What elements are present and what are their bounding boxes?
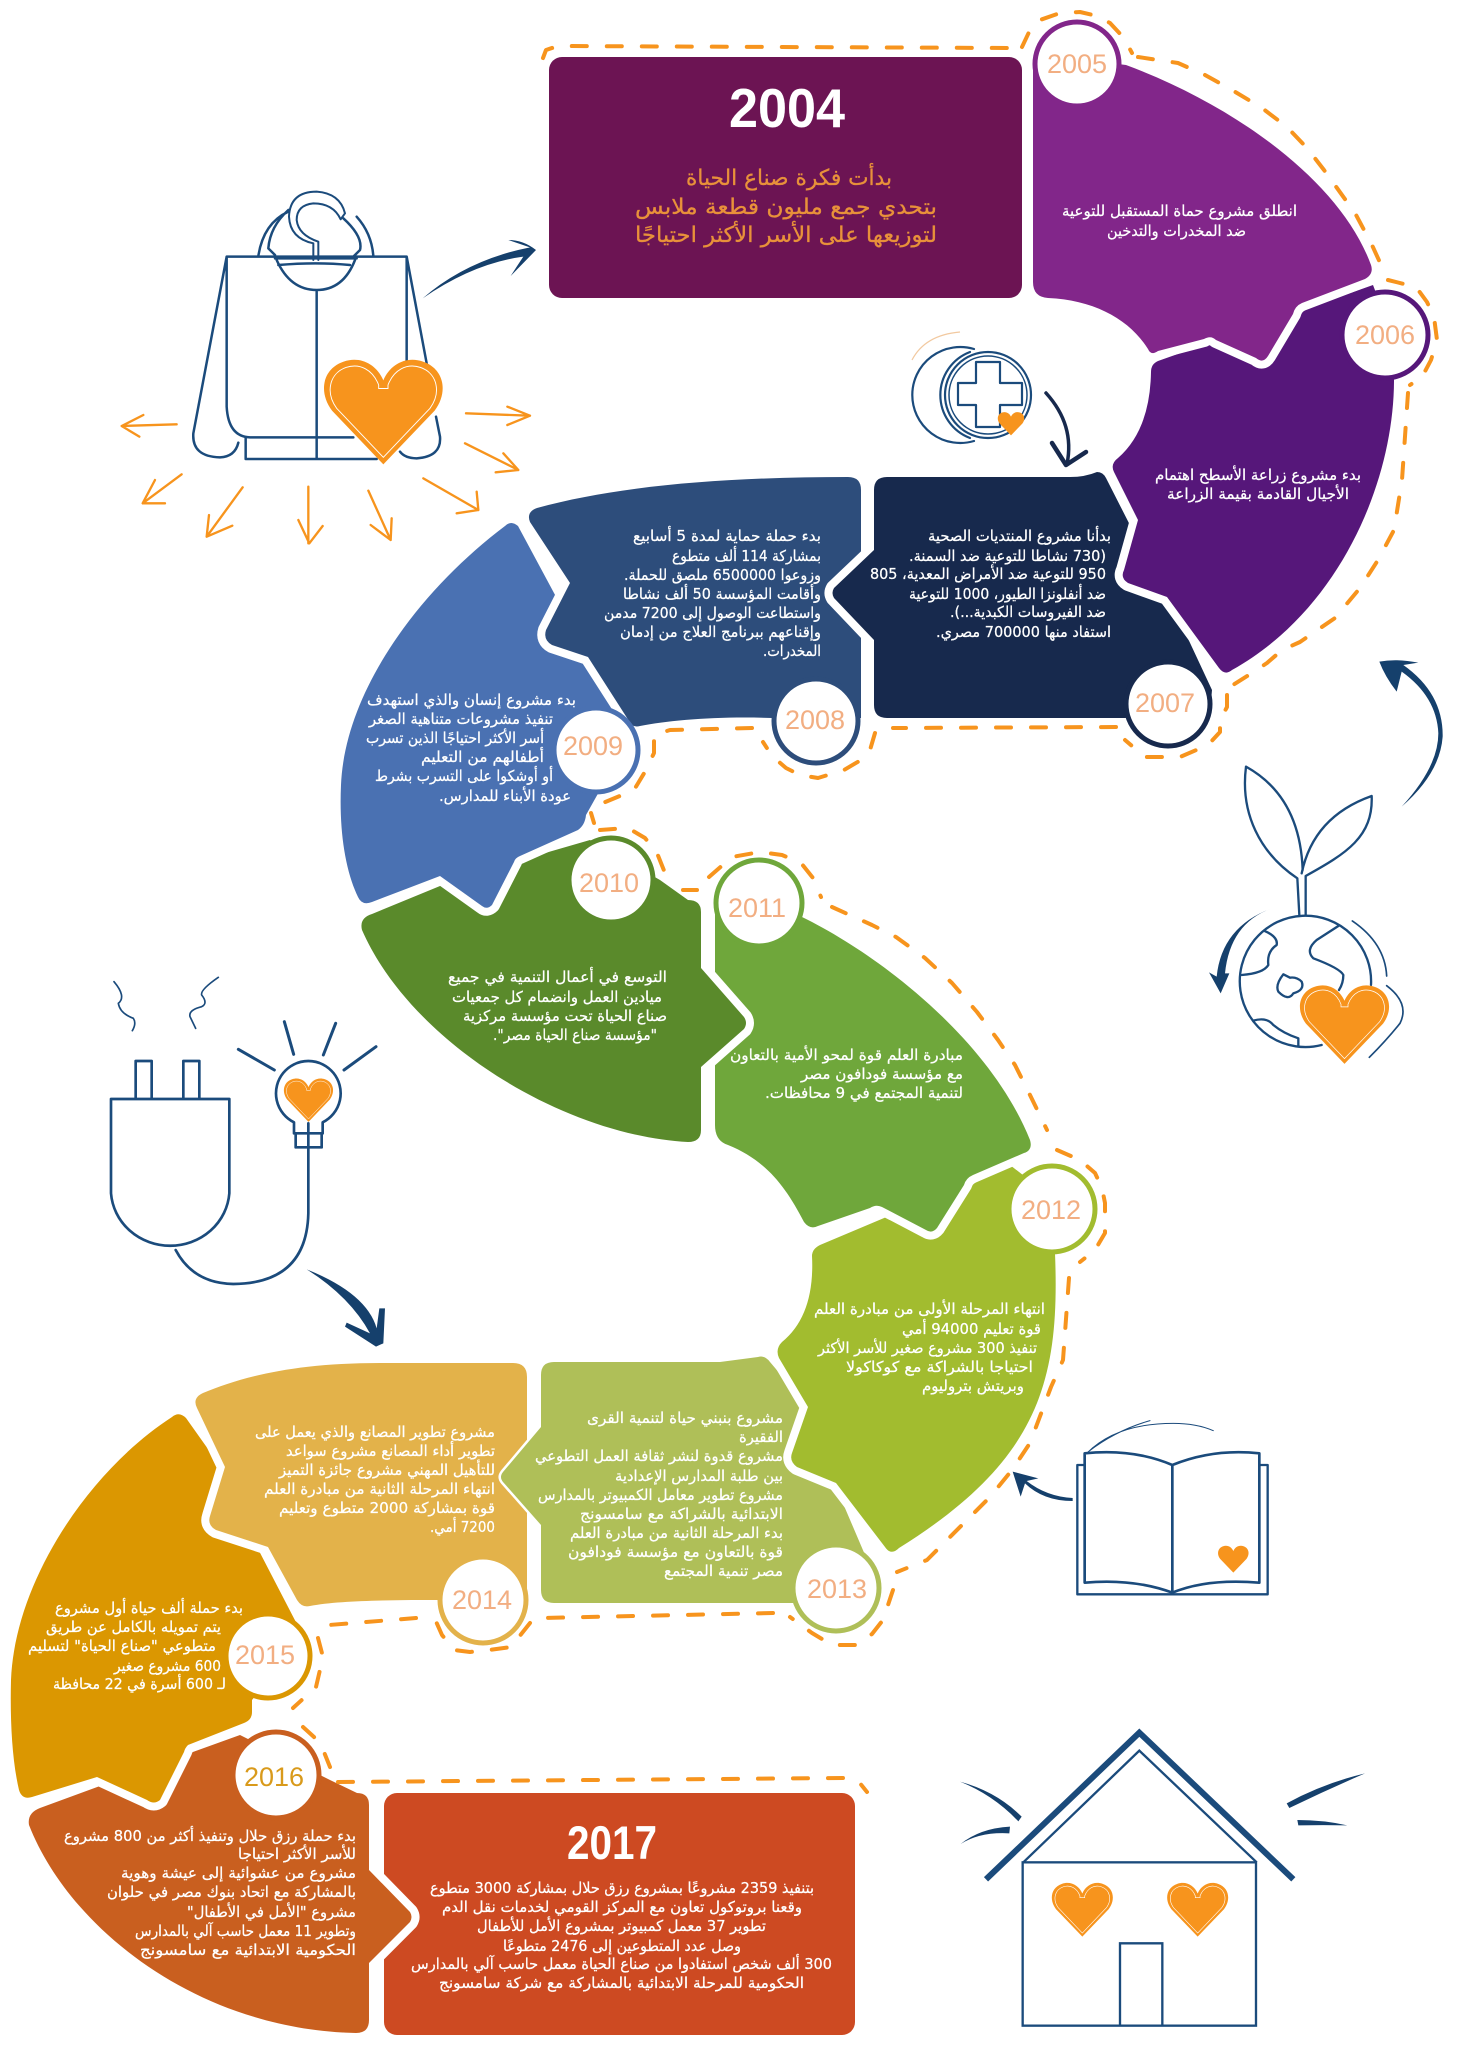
text block: 2012: انتهاء المرحلة الأولى من مبادرة العلم	[814, 1299, 1045, 1318]
text block: 2007: ضد الفيروسات الكبدية...).	[950, 603, 1106, 621]
text block: 2015	[28, 1598, 243, 1694]
text block: 2005: انطلق مشروع حماة المستقبل للتوعية	[1062, 202, 1297, 220]
year badge: 2015: 2015	[235, 1640, 295, 1670]
year badge: 2008: 2008	[785, 705, 845, 735]
text block: 2008: وإقناعهم ببرنامج العلاج من إدمان	[620, 623, 821, 642]
text block: 2005	[1062, 202, 1297, 240]
icon: medical coin	[912, 332, 1031, 443]
icon: plug and bulb	[111, 977, 376, 1284]
year badge: 2016: 2016	[244, 1762, 304, 1792]
dashed timeline outline	[293, 12, 1437, 1792]
icon: jacket with heart	[193, 192, 443, 464]
text block: 2008	[604, 526, 821, 660]
panel: 2011	[715, 900, 1031, 1232]
text block: 2005: ضد المخدرات والتدخين	[1107, 222, 1246, 240]
text block: 2015: متطوعي "صناع الحياة" لتسليم	[28, 1637, 216, 1656]
panel: 2014	[195, 1363, 527, 1606]
panel: 2007	[832, 472, 1212, 718]
year badge: 2013: 2013	[807, 1574, 867, 1604]
text block: 2012: قوة تعليم 94000 أمي	[902, 1319, 1041, 1339]
panel: 2008	[529, 477, 861, 726]
text block: 2009: أو أوشكوا على التسرب بشرط	[375, 766, 553, 785]
panel: 2017	[384, 1793, 855, 2035]
text block: 2016: بالمشاركة مع اتحاد بنوك مصر في حلوان	[107, 1883, 356, 1902]
year badge: 2011: 2011	[728, 893, 786, 923]
panel: 2004	[549, 57, 1022, 298]
year badge: 2008	[774, 679, 858, 763]
text block: 2017	[411, 1879, 832, 1992]
text block: 2015: يتم تمويله بالكامل عن طريق	[46, 1618, 221, 1636]
year badge: 2011	[716, 860, 802, 946]
text block: 2013: بين طلبة المدارس الإعدادية	[615, 1467, 783, 1485]
text block: 2017: تطوير 37 معمل كمبيوتر بمشروع الأمل للأطفال	[477, 1916, 766, 1935]
text block: 2017: 300 ألف شخص استفادوا من صناع الحياة معمل حاسب آلي بالمدارس	[411, 1954, 832, 1974]
year badge: 2005	[1035, 22, 1119, 106]
text block: 2015: 600 مشروع صغير	[113, 1657, 221, 1675]
icon: heart left	[1052, 1883, 1113, 1937]
panel: 2010	[361, 840, 746, 1142]
text block: 2017: الحكومية للمرحلة الابتدائية بالمشاركة مع شركة سامسونج	[439, 1974, 804, 1992]
text block: 2009: بدء مشروع إنسان والذي استهدف	[367, 691, 576, 710]
text block: 2014: 7200 أمي.	[430, 1517, 495, 1537]
arrow: book to 2012	[1013, 1472, 1073, 1501]
text block: 2016: بدء حملة رزق حلال وتنفيذ أكثر من 800 مشروع	[64, 1826, 356, 1845]
text block: 2009: عودة الأبناء للمدارس.	[439, 786, 571, 805]
text block: 2008: واستطاعت الوصول إلى 7200 مدمن	[604, 604, 821, 622]
panel: 2006	[1113, 285, 1394, 673]
text block: 2016: للأسر الأكثر احتياجا	[238, 1844, 356, 1863]
panel: 2015	[11, 1414, 300, 1802]
year badge: 2009: 2009	[563, 731, 623, 761]
icon: heart	[284, 1079, 333, 1122]
icon: house with hearts	[960, 1733, 1365, 2026]
text block: 2013: مشروع بنبني حياة لتنمية القرى	[587, 1409, 783, 1428]
text block: 2015: بدء حملة ألف حياة أول مشروع	[55, 1598, 243, 1617]
year badge: 2006	[1342, 292, 1428, 378]
year badge: 2012: 2012	[1021, 1195, 1081, 1225]
text block: 2010	[448, 967, 667, 1044]
text block: 2004: بتحدي جمع مليون قطعة ملابس	[635, 195, 937, 220]
text block: 2004: بدأت فكرة صناع الحياة	[686, 163, 892, 191]
text block: 2011: لتنمية المجتمع في 9 محافظات.	[765, 1084, 963, 1103]
text block: 2014: مشروع تطوير المصانع والذي يعمل على	[255, 1423, 495, 1442]
text block: 2004	[635, 163, 937, 248]
text block: 2013: الفقيرة	[739, 1428, 783, 1446]
text block: 2008: وزوعوا 6500000 ملصق للحملة.	[624, 566, 821, 584]
text block: 2007: 950 للتوعية ضد الأمراض المعدية، 805	[870, 564, 1106, 583]
text block: 2011: مبادرة العلم قوة لمحو الأمية بالتعاون	[730, 1045, 963, 1064]
text block: 2014: انتهاء المرحلة الثانية من مبادرة العلم	[264, 1480, 495, 1498]
icon: heart right	[1167, 1883, 1228, 1937]
text block: 2012	[814, 1299, 1045, 1395]
panel: 2005	[1033, 64, 1372, 361]
text block: 2008: المخدرات.	[763, 642, 821, 660]
panel: 2012	[778, 1165, 1056, 1552]
text block: 2014	[255, 1423, 495, 1537]
text block: 2013: قوة بالتعاون مع مؤسسة فودافون	[568, 1543, 783, 1561]
text block: 2006: بدء مشروع زراعة الأسطح اهتمام	[1155, 465, 1361, 484]
text block: 2007: (730 نشاطا للتوعية ضد السمنة.	[909, 547, 1106, 565]
arrow: jacket to 2004	[423, 240, 536, 298]
text block: 2006	[1155, 465, 1361, 503]
text block: 2017: وقعنا بروتوكول تعاون مع المركز القومي لخدمات نقل الدم	[442, 1898, 802, 1917]
panel: 2009	[341, 523, 640, 908]
text block: 2008: بمشاركة 114 ألف متطوع	[672, 546, 821, 565]
year badge: 2006: 2006	[1355, 320, 1415, 350]
text block: 2014: للتأهيل المهني مشروع جائزة التميز	[278, 1459, 495, 1480]
text block: 2013: بدء المرحلة الثانية من مبادرة العلم	[570, 1524, 783, 1542]
heading: 2017: 2017	[567, 1816, 657, 1869]
text block: 2009	[366, 691, 576, 805]
text block: 2007	[870, 526, 1111, 642]
panel: 2013	[501, 1357, 880, 1603]
text block: 2007: استفاد منها 700000 مصري.	[936, 623, 1111, 642]
text block: 2015: لـ 600 أسرة في 22 محافظة	[53, 1674, 226, 1694]
text block: 2006: الأجيال القادمة بقيمة الزراعة	[1167, 484, 1349, 503]
year badge: 2010	[569, 838, 653, 922]
text block: 2010: التوسع في أعمال التنمية في جميع	[448, 967, 667, 987]
text block: 2014: تطوير أداء المصانع مشروع سواعد	[286, 1441, 495, 1460]
year badge: 2014	[440, 1557, 526, 1643]
icon: orange arrows around jacket	[122, 407, 530, 543]
arrow: globe rotation	[1209, 908, 1272, 993]
icon: open book	[1077, 1421, 1268, 1594]
text block: 2009: تنفيذ مشروعات متناهية الصغر	[368, 710, 553, 728]
year badge: 2013	[793, 1545, 879, 1631]
text block: 2016: مشروع من عشوائية إلى عيشة وهوية	[121, 1864, 356, 1882]
year badge: 2007	[1126, 662, 1210, 746]
text block: 2004: لتوزيعها على الأسر الأكثر احتياجًا	[635, 221, 937, 248]
text block: 2012: تنفيذ 300 مشروع صغير للأسر الأكثر	[817, 1338, 1037, 1357]
text block: 2012: وبريتش بتروليوم	[922, 1377, 1024, 1395]
text block: 2011	[730, 1045, 963, 1103]
text block: 2016: مشروع "الأمل في الأطفال"	[187, 1902, 356, 1922]
text block: 2009: أطفالهم من التعليم	[421, 747, 544, 766]
text block: 2011: مع مؤسسة فودافون مصر	[800, 1065, 963, 1083]
text block: 2009: أسر الأكثر احتياجًا الذين تسرب	[366, 728, 544, 747]
icon: heart	[998, 412, 1024, 435]
year badge: 2015	[226, 1614, 310, 1698]
text block: 2013: مشروع تطوير معامل الكمبيوتر بالمدارس	[538, 1486, 783, 1504]
icon: heart	[324, 360, 443, 464]
text block: 2010: صناع الحياة تحت مؤسسة مركزية	[463, 1007, 667, 1025]
arrow: globe to 2006	[1379, 660, 1443, 807]
year badge: 2007: 2007	[1135, 688, 1195, 718]
arrow: medical icon to panel	[1046, 393, 1086, 465]
text block: 2017: وصل عدد المتطوعين إلى 2476 متطوعًا	[503, 1937, 741, 1955]
text block: 2010: "مؤسسة صناع الحياة مصر".	[493, 1026, 657, 1044]
text block: 2007: ضد أنفلونزا الطيور، 1000 للتوعية	[909, 584, 1106, 603]
text block: 2013	[535, 1409, 783, 1580]
year badge: 2005: 2005	[1047, 49, 1107, 79]
year badge: 2014: 2014	[452, 1585, 512, 1615]
text block: 2016: الحكومية الابتدائية مع سامسونج	[140, 1941, 356, 1959]
panel: 2016	[29, 1735, 411, 2033]
text block: 2012: احتياجا بالشراكة مع كوكاكولا	[846, 1358, 1033, 1376]
text block: 2013: مصر تنمية المجتمع	[664, 1562, 783, 1580]
arrow: plug to 2014	[307, 1269, 385, 1347]
icon: heart	[1300, 985, 1389, 1064]
year badge: 2009	[554, 708, 638, 792]
text block: 2016: وتطوير 11 معمل حاسب آلي بالمدارس	[135, 1922, 356, 1941]
year badge: 2012	[1009, 1166, 1095, 1252]
heading: 2004: 2004	[729, 77, 845, 139]
text block: 2007: بدأنا مشروع المنتديات الصحية	[928, 526, 1111, 545]
text block: 2013: الابتدائية بالشراكة مع سامسونج	[580, 1505, 783, 1523]
text block: 2014: قوة بمشاركة 2000 متطوع وتعليم	[279, 1499, 495, 1517]
text block: 2013: مشروع قدوة لنشر ثقافة العمل التطوعي	[535, 1447, 783, 1466]
text block: 2017: بتنفيذ 2359 مشروعًا بمشروع رزق حلال بمشاركة 3000 متطوع	[430, 1879, 814, 1897]
text block: 2010: ميادين العمل وانضمام كل جمعيات	[452, 988, 662, 1006]
text block: 2008: وأقامت المؤسسة 50 ألف نشاطا	[623, 584, 821, 603]
text block: 2016	[64, 1826, 356, 1959]
icon: globe with sprout	[1209, 767, 1403, 1064]
icon: heart	[1218, 1546, 1249, 1573]
year badge: 2016	[233, 1732, 319, 1818]
text block: 2008: بدء حملة حماية لمدة 5 أسابيع	[633, 526, 821, 545]
year badge: 2010: 2010	[579, 868, 639, 898]
